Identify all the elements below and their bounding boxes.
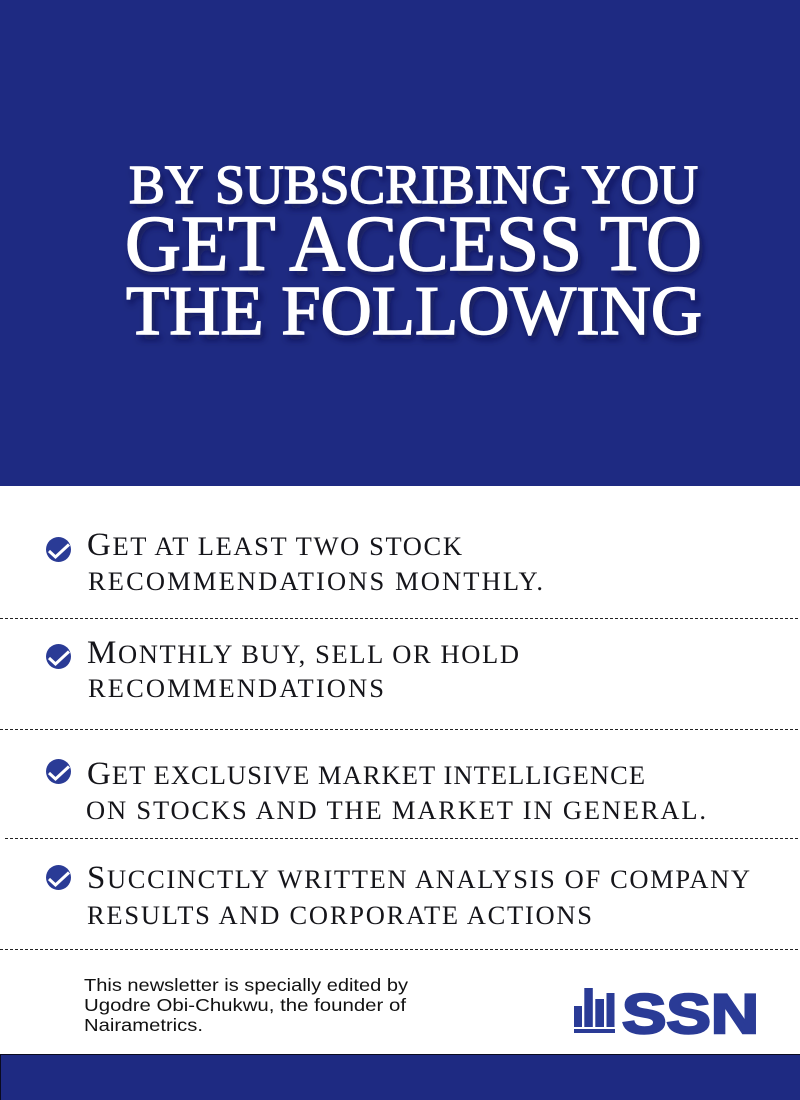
item 4 text: RESULTS AND CORPORATE ACTIONS xyxy=(87,900,592,930)
item 2 text: MONTHLY BUY, SELL OR HOLD xyxy=(87,635,519,671)
list item 4 xyxy=(46,860,750,930)
item 2 text: RECOMMENDATIONS xyxy=(88,673,384,703)
icon: bar chart mark xyxy=(574,988,615,1033)
item 3 text xyxy=(86,756,706,825)
item 4 text: SUCCINCTLY WRITTEN ANALYSIS OF COMPANY xyxy=(87,860,750,896)
logo wordmark: SSN xyxy=(622,982,759,1045)
title: THE FOLLOWING xyxy=(126,273,702,350)
icon: check badge 3 xyxy=(46,759,71,784)
title: BY SUBSCRIBING YOU xyxy=(129,154,698,215)
item 3 text: GET EXCLUSIVE MARKET INTELLIGENCE xyxy=(87,756,645,792)
list item 2 xyxy=(46,635,519,703)
editor note: Nairametrics. xyxy=(84,1015,203,1035)
item 4 text xyxy=(87,860,750,930)
bottom blue bar xyxy=(0,1054,800,1100)
item 1 text xyxy=(87,527,543,596)
list item 3 xyxy=(46,756,706,825)
item 2 text xyxy=(87,635,519,703)
list item 1 xyxy=(46,527,543,596)
editor note: Ugodre Obi-Chukwu, the founder of xyxy=(84,995,406,1015)
item 1 text: GET AT LEAST TWO STOCK xyxy=(87,527,462,563)
icon: check badge 2 xyxy=(46,644,71,669)
top blue panel xyxy=(0,0,800,486)
icon: check badge 4 xyxy=(46,865,71,890)
item 1 text: RECOMMENDATIONS MONTHLY. xyxy=(88,566,543,596)
icon: check badge 1 xyxy=(46,537,71,562)
logo: SSN xyxy=(574,982,759,1045)
title xyxy=(125,154,702,350)
item 3 text: ON STOCKS AND THE MARKET IN GENERAL. xyxy=(86,795,706,825)
editor note xyxy=(84,975,408,1035)
title: GET ACCESS TO xyxy=(125,201,702,288)
editor note: This newsletter is specially edited by xyxy=(84,975,408,995)
